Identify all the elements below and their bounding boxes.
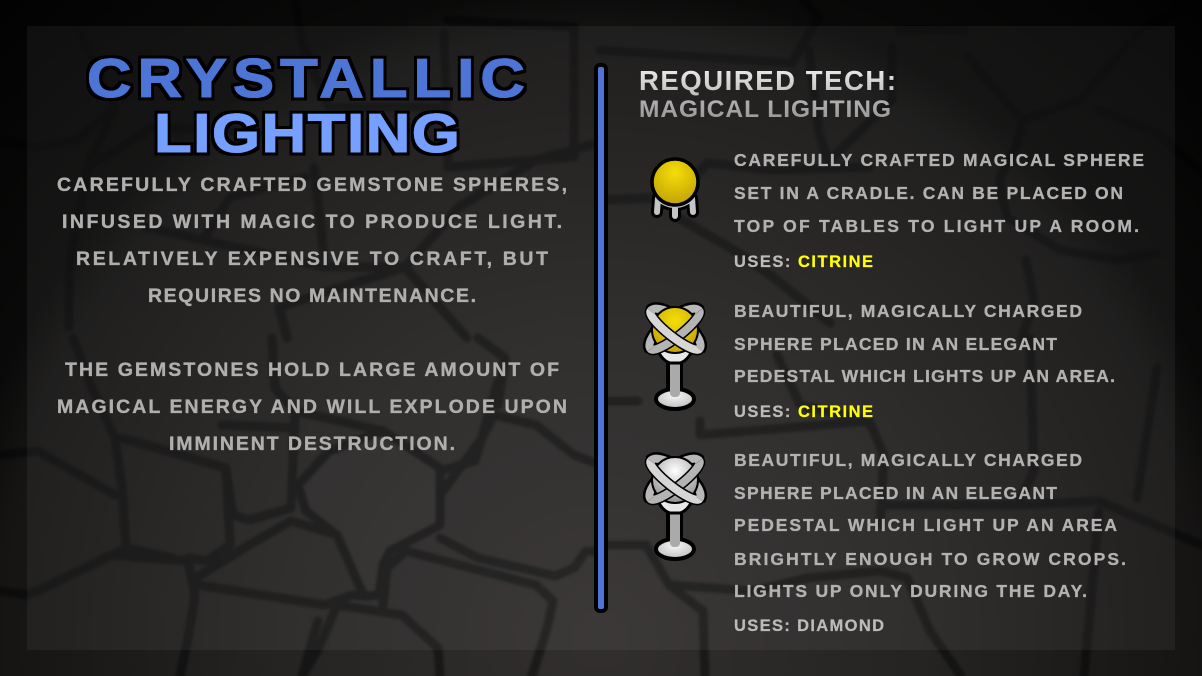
text: item 3 description: USES: DIAMOND (734, 617, 884, 635)
description paragraph 2 (57, 359, 567, 455)
description paragraph 1: INFUSED WITH MAGIC TO PRODUCE LIGHT. (62, 211, 562, 233)
text: item 2 description (734, 301, 1115, 421)
text: item 1 description (734, 150, 1144, 271)
title: LIGHTING (154, 103, 460, 164)
text: item 3 description: BRIGHTLY ENOUGH TO GROW CROPS. (734, 549, 1126, 569)
description paragraph 1 (57, 174, 567, 307)
vertical divider bar (596, 65, 606, 611)
icon: diamond pedestal (643, 451, 707, 559)
description paragraph 1: REQUIRES NO MAINTENANCE. (148, 285, 476, 307)
description paragraph 1: RELATIVELY EXPENSIVE TO CRAFT, BUT (76, 248, 548, 270)
text: item 2 description: SPHERE PLACED IN AN ELEGANT (734, 334, 1057, 354)
text: item 1 description: TOP OF TABLES TO LIGHT UP A ROOM. (734, 216, 1139, 236)
icon: citrine pedestal (643, 301, 707, 409)
text: item 3 description: PEDESTAL WHICH LIGHT UP AN AREA (734, 515, 1117, 535)
text: item 1 description: USES: CITRINE (734, 253, 873, 271)
text: item 3 description: SPHERE PLACED IN AN ELEGANT (734, 483, 1057, 503)
icon: citrine orb on cradle (652, 159, 698, 216)
description paragraph 1: CAREFULLY CRAFTED GEMSTONE SPHERES, (57, 174, 567, 196)
text: item 1 description: SET IN A CRADLE. CAN BE PLACED ON (734, 183, 1123, 203)
text: item 3 description (734, 450, 1126, 635)
text: item 1 description: CAREFULLY CRAFTED MAGICAL SPHERE (734, 150, 1144, 170)
description paragraph 2: MAGICAL ENERGY AND WILL EXPLODE UPON (57, 396, 567, 418)
heading: required tech (639, 65, 896, 123)
text: item 2 description: PEDESTAL WHICH LIGHTS UP AN AREA. (734, 366, 1115, 386)
description paragraph 2: IMMINENT DESTRUCTION. (169, 433, 455, 455)
text: item 3 description: BEAUTIFUL, MAGICALLY CHARGED (734, 450, 1082, 470)
text: item 3 description: LIGHTS UP ONLY DURING THE DAY. (734, 581, 1087, 601)
title: CRYSTALLIC (87, 48, 525, 109)
heading: required tech: REQUIRED TECH: (639, 65, 896, 96)
text: item 2 description: USES: CITRINE (734, 403, 873, 421)
heading: required tech: MAGICAL LIGHTING (639, 96, 891, 123)
text: item 2 description: BEAUTIFUL, MAGICALLY CHARGED (734, 301, 1082, 321)
description paragraph 2: THE GEMSTONES HOLD LARGE AMOUNT OF (65, 359, 559, 381)
title (87, 48, 525, 164)
